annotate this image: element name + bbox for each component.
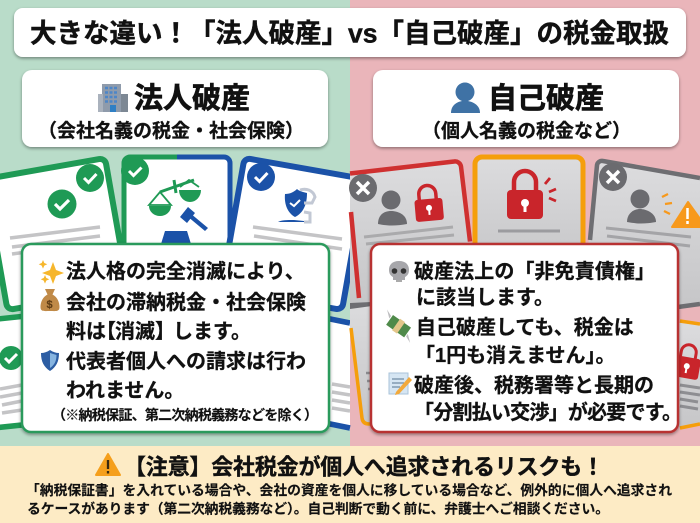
- card: lower right blue document: [318, 316, 350, 430]
- text: corporate bankruptcy body: 】: [155, 321, 175, 343]
- panel: corporate bankruptcy explanation: [22, 244, 329, 432]
- text: corporate bankruptcy body: 消滅: [115, 319, 155, 343]
- text: warning detail: るケースがあります（第二次納税義務など）。自己判断で動く前に、弁護士へご相談ください。: [27, 500, 609, 516]
- icon: office building: [98, 84, 128, 112]
- text: corporate bankruptcy body: 法人格の完全消滅により、: [66, 259, 305, 283]
- icon: skull: [389, 261, 409, 281]
- icon: sparkles: [39, 260, 64, 284]
- text: personal bankruptcy body: 破産法上の「非免責債権」: [414, 260, 655, 283]
- icon: grey person: [627, 190, 656, 224]
- text: personal bankruptcy body: 自己破産しても、税金は: [416, 316, 634, 339]
- text: personal bankruptcy body: 破産後、税務署等と長期の: [414, 374, 654, 397]
- background: left green side: [0, 0, 350, 446]
- panel: personal bankruptcy heading: [373, 70, 679, 147]
- panel: warning footer: [0, 446, 700, 523]
- text: corporate bankruptcy body: します。: [173, 321, 251, 343]
- panel: personal bankruptcy heading: （個人名義の税金など）: [422, 120, 631, 142]
- card: upper left green document: [0, 158, 128, 310]
- card: upper right blue document: [221, 158, 365, 320]
- title bar: 大きな違い！「法人破産」vs「自己破産」の税金取扱: [30, 18, 669, 48]
- panel: corporate bankruptcy heading: 法人破産: [134, 82, 250, 115]
- icon: grey person: [378, 190, 407, 226]
- icon: blue shield: [41, 350, 59, 371]
- text: personal bankruptcy body: に該当します。: [416, 286, 554, 309]
- text: corporate bankruptcy body: 料は: [66, 320, 106, 343]
- text: corporate bankruptcy body: 会社の滞納税金・社会保険: [66, 291, 306, 314]
- title bar: [14, 8, 686, 57]
- icon: red lock with alert rays: [507, 171, 556, 219]
- text: warning heading: 【注意】会社税金が個人へ追求されるリスクも！: [124, 454, 604, 480]
- icon: gavel: [161, 207, 208, 244]
- card: upper right grey warning document: [585, 161, 700, 307]
- text: personal bankruptcy body: 「1円も消えません」。: [415, 344, 616, 367]
- icon: money bag: $: [46, 299, 53, 311]
- icon: red lock: [672, 343, 700, 380]
- panel: personal bankruptcy explanation: [371, 244, 682, 432]
- text: personal bankruptcy body: 「分割払い交渉」が必要です。: [414, 400, 682, 424]
- icon: memo and pencil: [389, 373, 412, 395]
- icon: orange warning triangle: [662, 194, 700, 227]
- text: warning detail: 「納税保証書」を入れている場合や、会社の資産を個人に移している場合など、例外的に個人へ追求され: [26, 482, 672, 498]
- card: lower left orange document: [350, 297, 380, 424]
- background: right red side: [350, 0, 700, 446]
- icon: red lock: [413, 184, 444, 222]
- card: centre scales document: [121, 157, 230, 307]
- icon: warning triangle: [96, 454, 120, 475]
- card: lower right orange document with lock: [672, 321, 700, 428]
- icon: money with wings: [379, 310, 418, 343]
- card: centre orange locked document: [475, 157, 583, 267]
- icon: blue shield with hand: [278, 189, 315, 222]
- card: upper left red locked document: [349, 161, 473, 303]
- text: corporate bankruptcy body: 代表者個人への請求は行わ: [66, 350, 306, 373]
- card: lower left check document: [0, 315, 51, 432]
- text: corporate bankruptcy body: われません。: [66, 379, 184, 402]
- text: warning detail: [26, 482, 672, 516]
- text: corporate bankruptcy body: [66, 259, 306, 402]
- panel: corporate bankruptcy heading: （会社名義の税金・社会保険）: [38, 120, 304, 142]
- right document cards: [349, 157, 700, 428]
- panel: personal bankruptcy heading: 自己破産: [488, 82, 604, 115]
- text: exclusion note: （※納税保証、第二次納税義務などを除く）: [52, 407, 318, 423]
- panel: corporate bankruptcy heading: [22, 70, 328, 147]
- icon: scales of justice: [149, 180, 201, 216]
- icon: person silhouette: [451, 82, 480, 113]
- icon: money bag: [40, 289, 60, 311]
- text: corporate bankruptcy body: 【: [96, 321, 116, 343]
- text: personal bankruptcy body: [414, 260, 682, 424]
- left document cards: [0, 157, 365, 432]
